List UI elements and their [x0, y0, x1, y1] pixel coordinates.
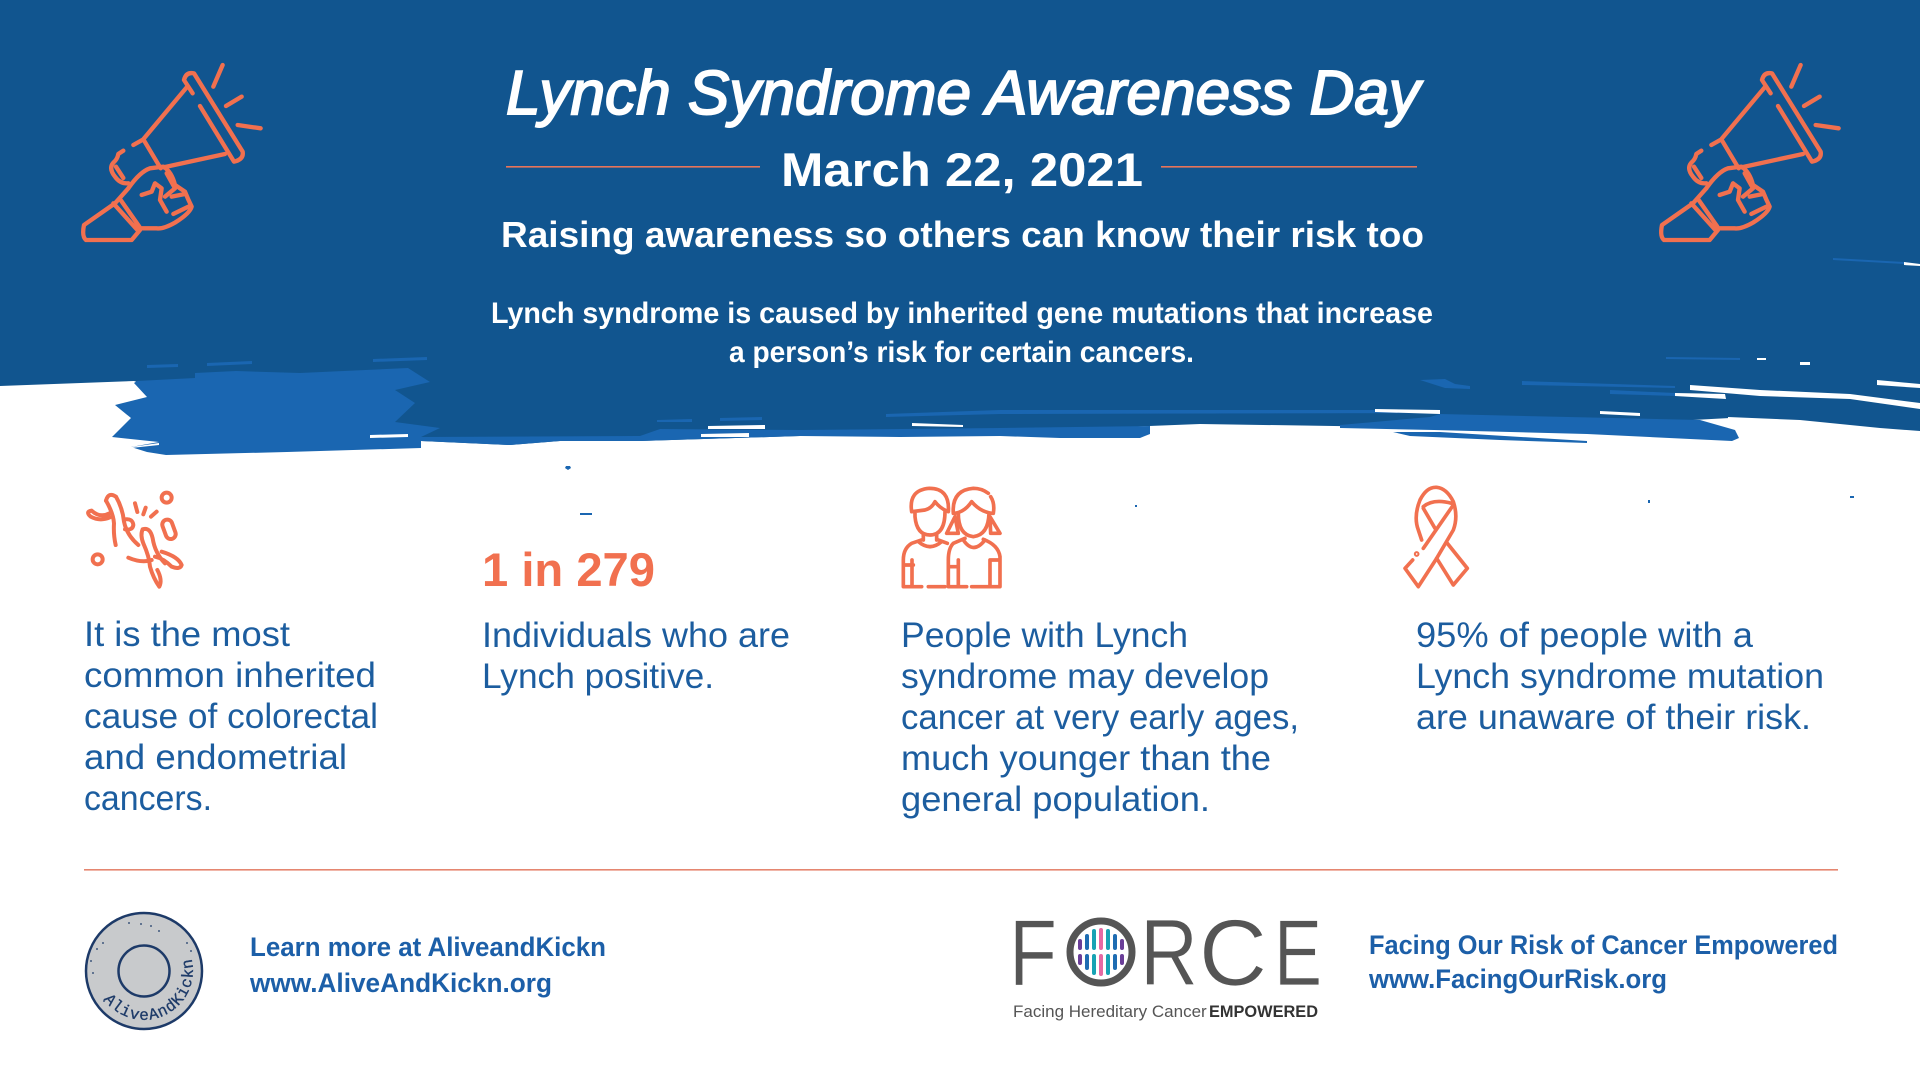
- text block: cancer at very early ages,: [901, 698, 1299, 737]
- text block: [84, 615, 378, 818]
- text block: [482, 616, 790, 696]
- intro text: Lynch syndrome is caused by inherited gene mutations that increase: [491, 297, 1433, 330]
- text block: syndrome may develop: [901, 657, 1269, 696]
- footer text: AliveAndKickn: [249, 932, 606, 998]
- logo: AliveAndKickn badge: AliveAndKickn: [103, 960, 194, 1020]
- text block: 95% of people with a: [1416, 616, 1754, 655]
- text block: Lynch positive.: [482, 657, 714, 696]
- panel: unaware of risk: [1405, 487, 1824, 737]
- intro text: [491, 297, 1433, 369]
- subtitle: Raising awareness so others can know their risk too: [501, 214, 1424, 255]
- footer text: FORCE: Facing Our Risk of Cancer Empowered: [1369, 930, 1838, 960]
- text block: common inherited: [84, 656, 376, 695]
- text block: [901, 616, 1299, 819]
- text block: much younger than the: [901, 739, 1271, 778]
- text block: People with Lynch: [901, 616, 1188, 655]
- panel: most common cause: [84, 493, 378, 818]
- panel: early onset: [901, 488, 1299, 819]
- panel: 1 in 279: [482, 543, 790, 696]
- date with rules: March 22, 2021: [781, 143, 1143, 196]
- text block: [1416, 616, 1824, 737]
- text block: It is the most: [84, 615, 290, 654]
- logo: FORCE: C: [1199, 900, 1267, 1005]
- footer text: AliveAndKickn: www.AliveAndKickn.org: [249, 968, 552, 998]
- footer text: AliveAndKickn: Learn more at AliveandKickn: [250, 932, 606, 962]
- statistic: 1 in 279: [482, 543, 655, 596]
- text block: Lynch syndrome mutation: [1416, 657, 1824, 696]
- logo: FORCE: EMPOWERED: [1209, 1002, 1318, 1021]
- icon: awareness ribbon: [1405, 487, 1467, 587]
- header brush background: [0, 0, 1920, 515]
- logo: FORCE: E: [1274, 900, 1322, 1005]
- icon: DNA strand: [88, 493, 182, 587]
- logo: FORCE: Facing Hereditary Cancer: [1013, 1002, 1207, 1021]
- icon: two children: [903, 488, 1000, 587]
- intro text: a person’s risk for certain cancers.: [729, 336, 1194, 369]
- icon: megaphone left: [83, 65, 261, 240]
- logo: FORCE: [1009, 900, 1322, 1021]
- icon: megaphone right: [1661, 65, 1839, 240]
- text block: cause of colorectal: [84, 697, 378, 736]
- footer text: FORCE: [1368, 930, 1838, 994]
- footer text: FORCE: www.FacingOurRisk.org: [1368, 964, 1667, 994]
- logo: FORCE: F: [1009, 900, 1057, 1005]
- title: Lynch Syndrome Awareness Day: [506, 59, 1424, 128]
- text block: cancers.: [84, 779, 212, 818]
- logo: FORCE: O: [1066, 900, 1136, 1005]
- text block: are unaware of their risk.: [1416, 698, 1811, 737]
- logo: FORCE: R: [1140, 900, 1198, 1005]
- text block: and endometrial: [84, 738, 347, 777]
- text block: Individuals who are: [482, 616, 790, 655]
- logo: AliveAndKickn badge: [84, 912, 204, 1030]
- text block: general population.: [901, 780, 1210, 819]
